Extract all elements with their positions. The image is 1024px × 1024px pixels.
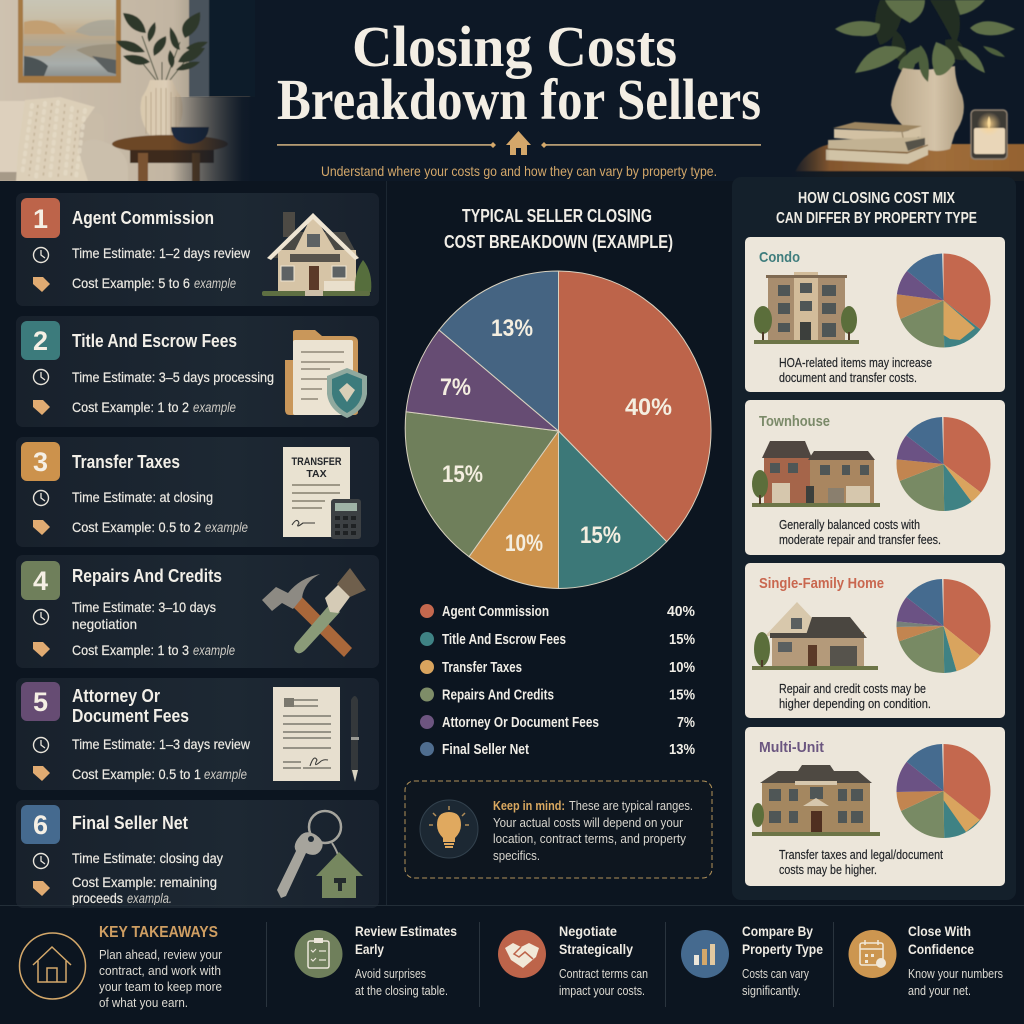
takeaway: compare by property type: significantly. (742, 984, 801, 998)
title (277, 14, 761, 132)
card: multi-unit: costs may be higher. (779, 863, 877, 877)
chart heading (444, 206, 673, 252)
card 4: repairs and credits: Cost Example: 1 to 3 (72, 642, 189, 658)
icon: transfer tax form and calculator: TAX (306, 468, 327, 480)
card: condo (745, 237, 1005, 392)
card: single-family home: Repair and credit costs may be (779, 682, 926, 696)
mini pie: townhouse (920, 440, 967, 488)
card 4: repairs and credits: negotiation (72, 616, 137, 632)
takeaway: close with confidence: Confidence (908, 941, 974, 957)
takeaway: close with confidence (848, 923, 1003, 998)
card: single-family home (745, 563, 1005, 718)
footer: key takeaways: your team to keep more (99, 980, 222, 994)
legend: Repairs And Credits (442, 688, 554, 704)
footer: key takeaways: contract, and work with (99, 964, 221, 978)
takeaway: negotiate strategically (498, 923, 648, 998)
callout: keep in mind: Keep in mind: (493, 798, 565, 813)
legend: 13% (669, 742, 695, 758)
card 2: title and escrow: 2 (33, 326, 48, 356)
legend: Transfer Taxes (442, 660, 522, 676)
icon: transfer tax form and calculator (283, 447, 361, 539)
callout: keep in mind: These are typical ranges. (569, 798, 693, 813)
callout: keep in mind: Your actual costs will depend on your (493, 815, 684, 830)
card 1: agent commission: Time Estimate: 1–2 days review (72, 245, 251, 261)
card 5: attorney or document fees: 5 (33, 687, 48, 717)
legend: 15% (669, 632, 695, 648)
card: multi-unit: Multi-Unit (759, 739, 824, 756)
photo: living room left (0, 0, 259, 185)
takeaway: review estimates: Early (355, 941, 384, 957)
footer: key takeaways: of what you earn. (99, 996, 188, 1010)
panel: property type comparison (732, 177, 1016, 900)
card: townhouse: Townhouse (759, 413, 830, 430)
legend: 10% (669, 660, 695, 676)
card 5: attorney or document fees: Time Estimate: 1–3 days review (72, 736, 251, 752)
takeaway: negotiate strategically: Negotiate (559, 923, 617, 939)
subtitle: Understand where your costs go and how they can vary by property type. (321, 163, 717, 179)
callout: keep in mind: specifics. (493, 848, 540, 863)
card: multi-unit: Transfer taxes and legal/document (779, 848, 943, 862)
card 2: title and escrow (16, 316, 379, 427)
takeaway: close with confidence: and your net. (908, 984, 971, 998)
takeaway: compare by property type: Costs can vary (742, 967, 810, 981)
icon: house (262, 212, 371, 296)
card 5: attorney or document fees: Document Fees (72, 706, 189, 726)
illustration: multi-unit building (752, 765, 880, 836)
card 3: transfer taxes: Time Estimate: at closing (72, 489, 213, 505)
icon: light bulb (420, 800, 478, 858)
card 1: agent commission: Cost Example: 5 to 6 (72, 275, 190, 291)
takeaway: compare by property type: Compare By (742, 923, 813, 939)
title: Breakdown for Sellers (277, 67, 761, 132)
icon: folder and shield (285, 330, 367, 418)
legend: Agent Commission (442, 604, 549, 620)
card 6: final seller net: exampla. (127, 891, 172, 906)
icon: hammer and brush (262, 568, 366, 657)
card: condo: Condo (759, 249, 800, 266)
takeaway: review estimates: Avoid surprises (355, 967, 426, 981)
header band (0, 0, 1024, 185)
chart heading: COST BREAKDOWN (EXAMPLE) (444, 232, 673, 252)
card: multi-unit (745, 727, 1005, 886)
legend: Attorney Or Document Fees (442, 715, 599, 731)
callout: keep in mind (405, 781, 712, 878)
pie chart: typical closing cost breakdown (405, 271, 711, 588)
footer: key takeaways: Plan ahead, review your (99, 948, 222, 962)
card 3: transfer taxes: Transfer Taxes (72, 452, 180, 472)
card 1: agent commission (16, 193, 379, 306)
takeaway: close with confidence: Know your numbers (908, 967, 1003, 981)
icon: document and pen (273, 687, 359, 782)
card 6: final seller net: Final Seller Net (72, 813, 188, 833)
takeaway: close with confidence: Close With (908, 923, 971, 939)
card 5: attorney or document fees: Cost Example: 0.5 to 1 (72, 766, 201, 782)
card: single-family home: Single-Family Home (759, 575, 884, 592)
card 6: final seller net: 6 (33, 810, 48, 840)
card: townhouse: moderate repair and transfer fees. (779, 533, 941, 547)
pie chart: typical closing cost breakdown: 15% (580, 522, 621, 549)
card: townhouse: Generally balanced costs with (779, 518, 920, 532)
illustration: townhouse row (752, 441, 880, 507)
icon: house in circle (20, 933, 86, 999)
legend: 7% (677, 715, 695, 731)
card 4: repairs and credits (16, 555, 379, 668)
card 2: title and escrow: Title And Escrow Fees (72, 331, 237, 351)
divider with house icon (277, 131, 761, 155)
legend: 40% (667, 604, 695, 620)
panel heading (776, 190, 977, 227)
panel heading: HOW CLOSING COST MIX (798, 190, 956, 207)
legend: Title And Escrow Fees (442, 632, 566, 648)
card 6: final seller net (16, 800, 379, 908)
card: townhouse (745, 400, 1005, 555)
legend: Final Seller Net (442, 742, 529, 758)
legend (420, 604, 695, 758)
pie chart: typical closing cost breakdown: 13% (491, 315, 533, 342)
card 5: attorney or document fees (16, 678, 379, 790)
title: Closing Costs (352, 14, 677, 79)
footer: key takeaways: KEY TAKEAWAYS (99, 924, 218, 941)
pie chart: typical closing cost breakdown: 10% (505, 530, 543, 557)
panel: cost cards (16, 193, 379, 908)
card 2: title and escrow: Time Estimate: 3–5 days processing (72, 369, 274, 385)
pie chart: typical closing cost breakdown: 15% (442, 461, 483, 488)
illustration: condo building (754, 272, 859, 344)
mini pie detail: condo transfer wedge (944, 300, 975, 340)
card 1: agent commission: example (194, 276, 236, 291)
takeaway: negotiate strategically: Strategically (559, 941, 633, 957)
photo: shelf right (790, 0, 1024, 183)
takeaway: review estimates (294, 923, 457, 998)
card: condo: HOA-related items may increase (779, 356, 932, 370)
card 3: transfer taxes: example (205, 520, 248, 535)
card 4: repairs and credits: Time Estimate: 3–10 days (72, 599, 216, 615)
mini pie detail: multi-unit transfer wedge (944, 791, 980, 832)
card: single-family home: higher depending on condition. (779, 697, 931, 711)
card 3: transfer taxes (16, 437, 379, 547)
mini pie: condo (920, 277, 967, 324)
card 1: agent commission: 1 (33, 204, 48, 234)
card 3: transfer taxes: Cost Example: 0.5 to 2 (72, 519, 201, 535)
illustration: single-family house (752, 602, 878, 670)
takeaway: negotiate strategically: impact your costs. (559, 984, 645, 998)
takeaway: negotiate strategically: Contract terms can (559, 967, 648, 981)
card 6: final seller net: proceeds (72, 890, 123, 906)
card: condo: document and transfer costs. (779, 371, 917, 385)
mini pie: single-family home (920, 602, 967, 650)
callout: keep in mind: location, contract terms, and property (493, 831, 686, 846)
icon: keys with house fob (277, 811, 363, 898)
card 6: final seller net: Time Estimate: closing day (72, 850, 223, 866)
card 2: title and escrow: Cost Example: 1 to 2 (72, 399, 189, 415)
card 4: repairs and credits: example (193, 643, 235, 658)
card 4: repairs and credits: Repairs And Credits (72, 566, 222, 586)
card 6: final seller net: Cost Example: remaining (72, 874, 217, 890)
icon: transfer tax form and calculator: TRANSFER (292, 456, 342, 468)
takeaway: review estimates: Review Estimates (355, 923, 457, 939)
card 3: transfer taxes: 3 (33, 447, 48, 477)
takeaway: review estimates: at the closing table. (355, 984, 448, 998)
pie chart: typical closing cost breakdown: 7% (440, 374, 471, 401)
takeaway: compare by property type: Property Type (742, 941, 823, 957)
footer: key takeaways (0, 905, 1024, 1010)
card 4: repairs and credits: 4 (33, 566, 48, 596)
card 5: attorney or document fees: example (204, 767, 247, 782)
mini pie: multi-unit (920, 768, 967, 814)
card 1: agent commission: Agent Commission (72, 208, 214, 228)
legend: 15% (669, 688, 695, 704)
card 5: attorney or document fees: Attorney Or (72, 686, 160, 706)
chart heading: TYPICAL SELLER CLOSING (462, 206, 652, 226)
panel heading: CAN DIFFER BY PROPERTY TYPE (776, 210, 977, 227)
card 2: title and escrow: example (193, 400, 236, 415)
column rule (386, 181, 387, 906)
takeaway: compare by property type (681, 923, 823, 998)
pie chart: typical closing cost breakdown: 40% (625, 394, 672, 421)
